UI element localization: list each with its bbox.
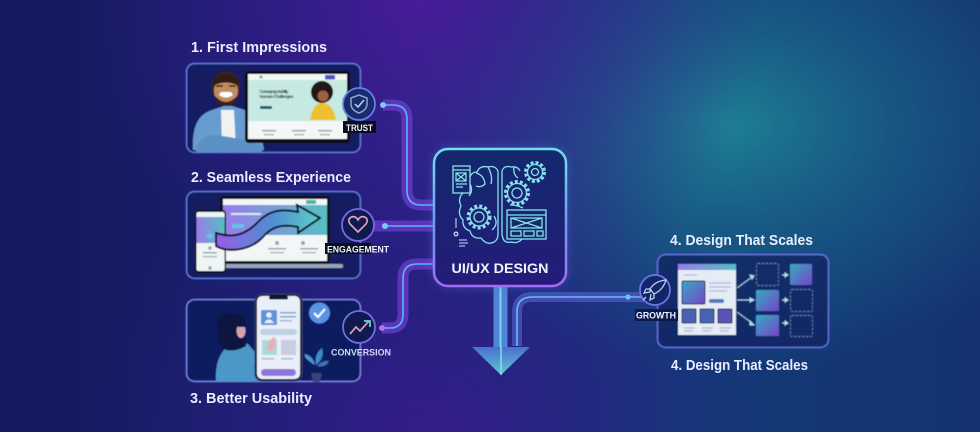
- heading: design that scales bottom: 4. Design That Scales: [671, 358, 808, 374]
- plant: [305, 348, 329, 382]
- woman using phone: [216, 313, 276, 382]
- module tiles: [756, 264, 812, 336]
- icon: conversion trend: [343, 311, 375, 343]
- right wireframe window: [507, 210, 546, 239]
- smartphone: [255, 294, 302, 381]
- check badge: [309, 302, 330, 324]
- upper right gear: [526, 162, 544, 182]
- heading: first impressions: 1. First Impressions: [191, 40, 327, 56]
- label: engagement: ENGAGEMENT: [327, 244, 389, 256]
- heading: better usability: 3. Better Usability: [190, 391, 312, 407]
- tablet with website: Conveying Usability: [260, 89, 289, 94]
- scale arrows: [737, 273, 788, 325]
- wave arrow: [216, 205, 320, 250]
- connector: trust to centre: [380, 102, 436, 205]
- icon: growth rocket: [640, 275, 670, 305]
- heading: design that scales top: 4. Design That Scales: [670, 233, 813, 249]
- middle right gear: [506, 182, 528, 204]
- connector: conversion to centre: [379, 264, 436, 331]
- left wireframe window: [453, 166, 470, 193]
- down arrow: [472, 285, 530, 375]
- left brain gear: [468, 206, 490, 228]
- label: conversion: CONVERSION: [331, 348, 391, 358]
- label: trust: TRUST: [346, 123, 373, 134]
- tablet with website: Human Challenges: [260, 94, 294, 99]
- connector: growth to arrow: [517, 294, 645, 346]
- tablet with website: [245, 71, 350, 143]
- brain and gears icon: [453, 162, 546, 246]
- laptop with website: [220, 196, 343, 268]
- label: growth: GROWTH: [636, 310, 676, 322]
- icon: trust shield: [343, 88, 375, 120]
- connector: engagement to centre: [374, 223, 436, 229]
- heading: seamless experience: 2. Seamless Experience: [191, 170, 351, 186]
- panel: better usability: [186, 294, 360, 382]
- icon: engagement heart: [342, 209, 374, 241]
- phone with website: [195, 210, 226, 273]
- pointer details: [456, 218, 468, 246]
- panel: first impressions: [186, 64, 360, 152]
- panel: seamless experience: [186, 192, 360, 278]
- panel: design that scales: [658, 254, 828, 348]
- website wireframe: [678, 264, 736, 335]
- central panel: UI/UX design: [434, 149, 566, 286]
- brain outline: [459, 166, 523, 243]
- smiling man: [193, 72, 264, 152]
- central label: UI/UX DESIGN: [452, 260, 548, 276]
